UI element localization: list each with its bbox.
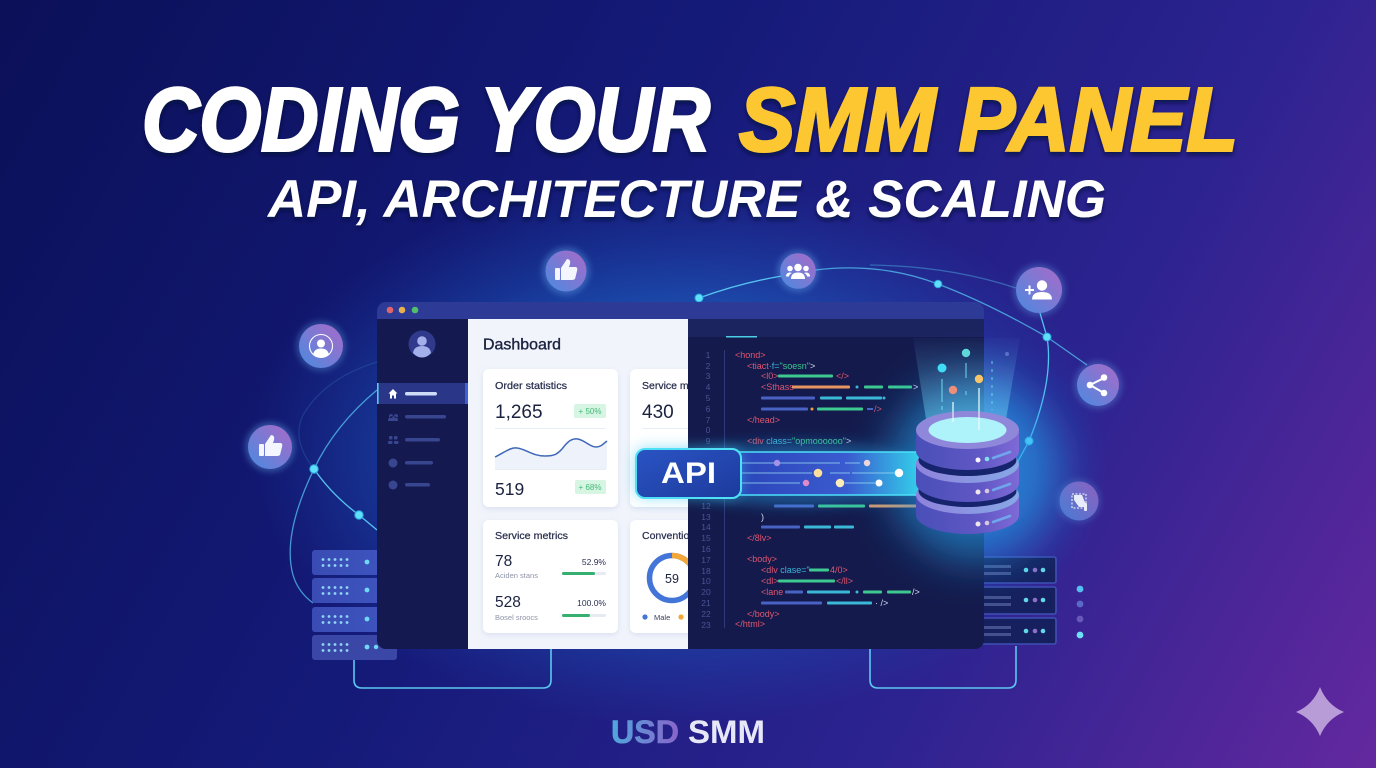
card: conversion donut — [629, 520, 688, 636]
logo: USD — [611, 714, 679, 750]
network lines — [290, 265, 1087, 603]
line numbers: 23 — [701, 620, 711, 630]
line numbers: 1 — [706, 350, 711, 360]
card: order statistics: + 50% — [579, 407, 601, 416]
code text: <hond> — [735, 350, 766, 360]
application window — [377, 302, 984, 649]
bottom disc — [916, 475, 1019, 534]
status dots — [1077, 586, 1083, 638]
sparkle mark — [1296, 687, 1344, 736]
card: service partial — [629, 369, 688, 510]
code text: /> — [912, 587, 920, 597]
line chart — [495, 439, 607, 469]
card: order statistics — [483, 369, 618, 507]
code text: <dl> — [761, 576, 779, 586]
card: conversion donut: Conventions — [642, 530, 700, 542]
dashboard main area — [468, 319, 688, 649]
icon: share — [1074, 361, 1122, 409]
title: SMM PANEL — [739, 70, 1238, 170]
line numbers: 3 — [706, 371, 711, 381]
line numbers: 12 — [701, 501, 711, 511]
card: service metrics — [483, 520, 618, 633]
glow behind database — [670, 380, 1060, 560]
api data band — [738, 452, 920, 495]
line numbers: 15 — [701, 533, 711, 543]
line numbers: 22 — [701, 609, 711, 619]
title: CODING YOUR — [142, 70, 710, 170]
card: service metrics: 100.0% — [577, 598, 606, 608]
line numbers: 5 — [706, 393, 711, 403]
line numbers: 6 — [706, 404, 711, 414]
api badge: API — [661, 457, 716, 490]
card: order statistics: + 68% — [579, 483, 601, 492]
line numbers: 21 — [701, 598, 711, 608]
line numbers: 20 — [701, 587, 711, 597]
line numbers: 17 — [701, 555, 711, 565]
code text: </html> — [735, 619, 765, 629]
line numbers: 0 — [706, 425, 711, 435]
card: order statistics: 519 — [495, 479, 524, 499]
line numbers: 14 — [701, 522, 711, 532]
code text — [735, 350, 920, 629]
icon: add user — [1013, 264, 1065, 316]
line numbers: 13 — [701, 512, 711, 522]
code text: <body> — [747, 554, 777, 564]
code text: > — [913, 382, 918, 392]
icon: group — [777, 250, 819, 292]
card: service partial: Service metrics — [642, 380, 714, 392]
right server rack — [975, 557, 1056, 644]
line numbers: 7 — [706, 415, 711, 425]
code text: /> — [874, 404, 882, 414]
left connector — [354, 649, 551, 688]
code text: 4/0> — [830, 565, 848, 575]
card: service metrics: Aciden stans — [495, 571, 538, 580]
code text: </ll> — [836, 576, 853, 586]
card: service metrics: Service metrics — [495, 530, 568, 542]
code text: </> — [836, 371, 849, 381]
line numbers: 18 — [701, 566, 711, 576]
line numbers: 10 — [701, 576, 711, 586]
card: conversion donut: 59 — [665, 572, 679, 586]
code editor — [688, 319, 984, 649]
left server rack — [312, 550, 397, 660]
database stack — [916, 388, 1019, 534]
card: order statistics: Order statistics — [495, 380, 567, 392]
nav items — [388, 414, 446, 490]
line numbers: 2 — [706, 361, 711, 371]
icon: chip — [1057, 479, 1101, 523]
network nodes — [310, 280, 1051, 519]
card: service partial: 430 — [642, 402, 674, 423]
line numbers: 16 — [701, 544, 711, 554]
code text: <dlv clase=" — [761, 565, 810, 575]
subtitle: API, ARCHITECTURE & SCALING — [266, 170, 1106, 229]
code text: <lane — [761, 587, 783, 597]
floating particles — [938, 349, 1009, 430]
code text: ) — [761, 512, 764, 522]
code text: </body> — [747, 609, 780, 619]
avatar — [408, 330, 436, 358]
code bars — [761, 374, 917, 604]
code text: <tiact·f="soesn"> — [747, 361, 815, 371]
top disc — [916, 388, 1019, 470]
code text: <l0> — [761, 371, 779, 381]
card: service metrics: 78 — [495, 553, 512, 570]
window title bar — [377, 302, 984, 319]
card: service metrics: 528 — [495, 594, 521, 611]
sidebar — [377, 319, 468, 649]
right connector — [870, 646, 1016, 688]
line numbers — [701, 350, 711, 630]
code text: </head> — [747, 415, 780, 425]
code text: <div class="opmoooooo"> — [747, 436, 851, 446]
middle disc — [916, 444, 1019, 502]
line numbers: 9 — [706, 436, 711, 446]
light beam — [913, 338, 1020, 425]
card: service metrics: 52.9% — [582, 557, 606, 567]
title — [142, 70, 1238, 170]
api badge — [635, 448, 741, 498]
card: service metrics: Bosel sroocs — [495, 613, 538, 622]
card: order statistics: 1,265 — [495, 402, 543, 423]
icon: user — [296, 321, 346, 371]
dashboard heading: Dashboard — [483, 336, 561, 354]
line numbers: 4 — [706, 382, 711, 392]
code text: <Sthass — [761, 382, 794, 392]
logo: SMM — [688, 714, 765, 750]
logo — [611, 714, 765, 750]
code text: · /> — [875, 598, 888, 608]
card: conversion donut: Male — [654, 613, 670, 622]
icon: thumbs up top — [542, 247, 590, 295]
active nav item — [377, 383, 468, 404]
code text: </8lv> — [747, 533, 772, 543]
icon: thumbs up left — [245, 422, 295, 472]
